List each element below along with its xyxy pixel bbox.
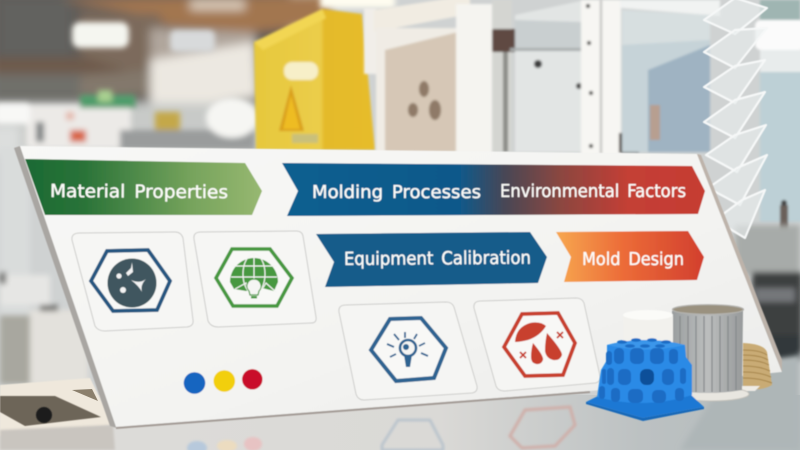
icon: navy hexagon with particles	[91, 250, 170, 311]
icon: red hexagon with drops	[504, 313, 575, 376]
molded parts group	[586, 305, 772, 421]
board edge	[14, 146, 117, 428]
banner: Mold Design	[556, 231, 704, 282]
machine frame and panels	[364, 0, 800, 275]
banner: Equipment Calibration	[316, 232, 547, 287]
banner: Molding Processes and Environmental Factors: Environmental Factors	[500, 181, 686, 202]
tan stacked discs	[742, 343, 772, 391]
banner: Molding Processes and Environmental Factors: Molding Processes	[312, 182, 481, 203]
banner: Mold Design: Mold Design	[582, 249, 684, 270]
card 3: equipment icon	[339, 302, 477, 400]
banner: Material Properties: Material Properties	[50, 181, 228, 203]
white cylinder	[623, 310, 673, 350]
card 2: environment icon	[194, 231, 316, 327]
board face	[20, 146, 782, 427]
banner: Material Properties	[25, 159, 262, 215]
banner: Molding Processes and Environmental Factors	[282, 163, 705, 216]
spiral plastic part	[704, 0, 767, 238]
card 4: mold design icon	[474, 298, 600, 391]
banner: Equipment Calibration: Equipment Calibration	[344, 248, 531, 270]
indicator dots	[184, 369, 262, 394]
display board	[14, 146, 782, 429]
card 1: material icon	[72, 232, 193, 331]
icon: green hexagon with globe and bulb	[216, 249, 292, 306]
tabletop and reflections	[0, 355, 800, 450]
blue molded lattice part	[586, 338, 704, 421]
grey ribbed cylinder	[672, 305, 749, 401]
icon: blue hexagon with light bulb	[371, 318, 446, 381]
yellow cabinet	[254, 9, 375, 150]
